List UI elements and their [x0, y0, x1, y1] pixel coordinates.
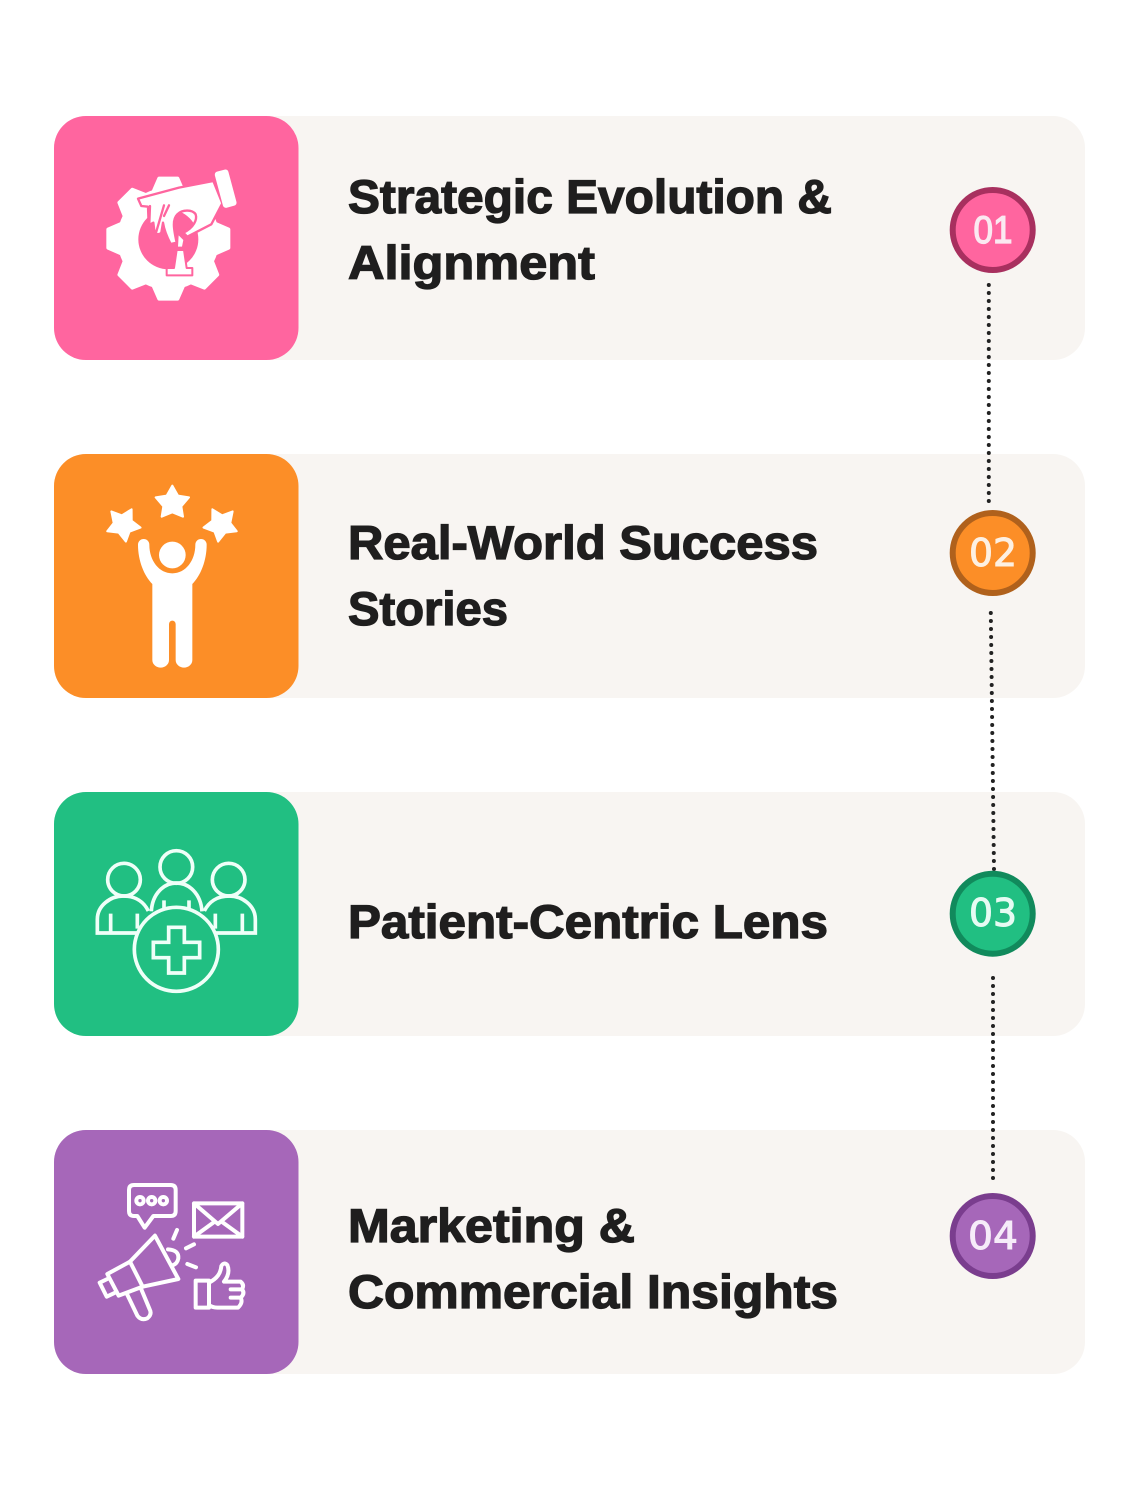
icon tile 3: [54, 792, 298, 1036]
badge 04: 04: [968, 1214, 1018, 1258]
connector: dotted timeline: [989, 285, 994, 1180]
heading 1: Strategic Evolution &: [348, 170, 832, 223]
badge 03: 03: [969, 891, 1017, 935]
card background 3: [54, 792, 1085, 1036]
heading 1: [348, 170, 832, 289]
badge 01: [953, 190, 1033, 270]
heading 1: Alignment: [348, 236, 595, 289]
card background 1: [54, 116, 1085, 360]
icon: gear with hand: [108, 169, 237, 299]
heading 2: Real-World Success: [348, 516, 818, 569]
icon: megaphone, speech bubble, envelope and thumbs up: [100, 1185, 243, 1319]
panel: real-world success stories: [54, 454, 1085, 698]
badge 02: [953, 513, 1033, 593]
badge 02: 02: [969, 531, 1017, 575]
icon tile 1: [54, 116, 298, 360]
panel: patient-centric lens: [54, 792, 1085, 1036]
heading 4: Marketing &: [348, 1199, 635, 1252]
heading 2: [348, 516, 818, 635]
panel: strategic evolution and alignment: [54, 116, 1085, 360]
icon: person with stars: [102, 486, 242, 668]
heading 4: [348, 1199, 838, 1318]
badge 03: [953, 874, 1033, 954]
badge 04: [953, 1196, 1033, 1276]
heading 2: Stories: [348, 582, 508, 635]
panel: marketing and commercial insights: [54, 1130, 1085, 1374]
heading 3: Patient-Centric Lens: [348, 895, 828, 948]
badge 01: 01: [974, 209, 1012, 252]
card background 4: [54, 1130, 1085, 1374]
icon tile 4: [54, 1130, 298, 1374]
icon: patients with medical cross: [97, 851, 255, 991]
icon tile 2: [54, 454, 298, 698]
card background 2: [54, 454, 1085, 698]
heading 4: Commercial Insights: [348, 1265, 838, 1318]
